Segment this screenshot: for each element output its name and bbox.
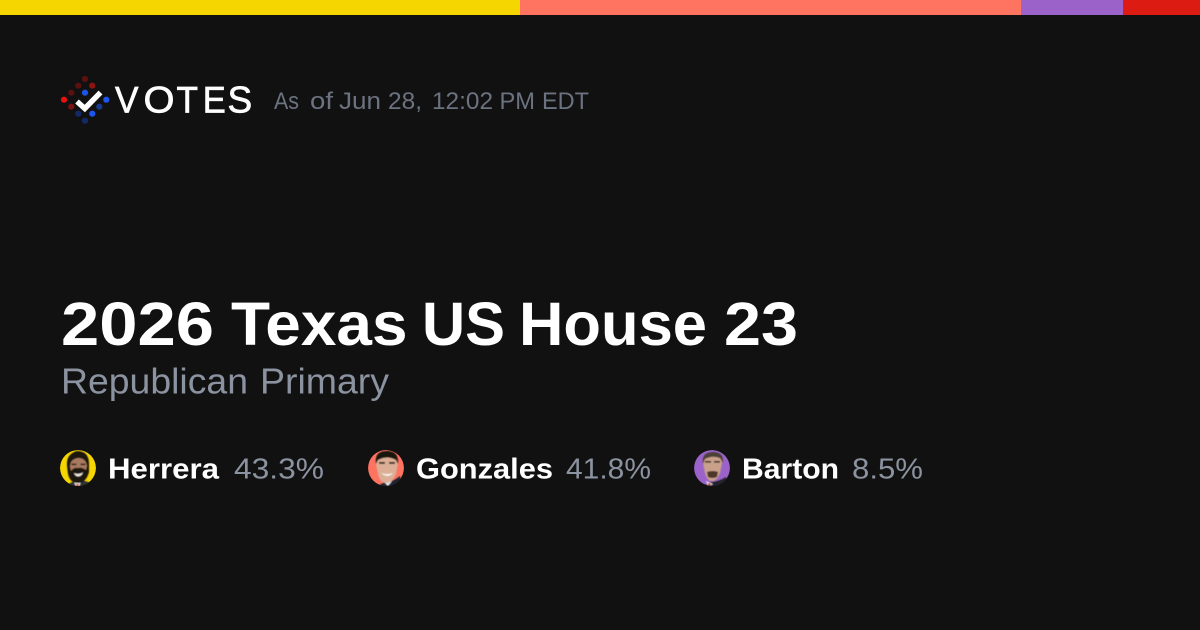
vote share bar <box>0 0 1200 15</box>
logo: VOTES <box>61 76 252 124</box>
subtitle <box>61 360 389 402</box>
wordmark: O <box>144 79 174 121</box>
title: Texas <box>231 290 408 358</box>
vote share: 41.8% <box>566 454 651 486</box>
avatar: Gonzales <box>368 450 404 490</box>
wordmark: E <box>203 79 226 121</box>
candidate: Gonzales <box>368 450 650 486</box>
wordmark: S <box>228 79 252 121</box>
timestamp: As <box>274 88 299 115</box>
candidate: Herrera <box>60 450 323 486</box>
timestamp: of <box>310 88 333 115</box>
name: Barton <box>742 454 839 486</box>
title <box>61 290 798 358</box>
timestamp <box>274 88 589 115</box>
title: US <box>422 290 505 358</box>
vote share: 8.5% <box>852 454 923 486</box>
timestamp: PM <box>500 88 535 115</box>
subtitle: Primary <box>260 360 389 402</box>
wordmark: V <box>115 79 138 121</box>
candidate: Barton <box>694 450 922 486</box>
vote share: 43.3% <box>234 454 324 486</box>
timestamp: 28, <box>388 88 422 115</box>
timestamp: Jun <box>339 88 381 115</box>
icon: dotted diamond check mark <box>61 76 109 124</box>
timestamp: EDT <box>542 88 589 115</box>
name: Herrera <box>108 454 220 486</box>
timestamp: 12:02 <box>432 88 493 115</box>
wordmark <box>115 79 252 121</box>
name: Gonzales <box>416 454 553 486</box>
title: 23 <box>724 290 798 358</box>
title: 2026 <box>61 290 214 358</box>
subtitle: Republican <box>61 360 248 402</box>
avatar: Barton <box>694 450 730 490</box>
title: House <box>519 290 707 358</box>
wordmark: T <box>176 79 198 121</box>
avatar: Herrera <box>60 450 96 490</box>
